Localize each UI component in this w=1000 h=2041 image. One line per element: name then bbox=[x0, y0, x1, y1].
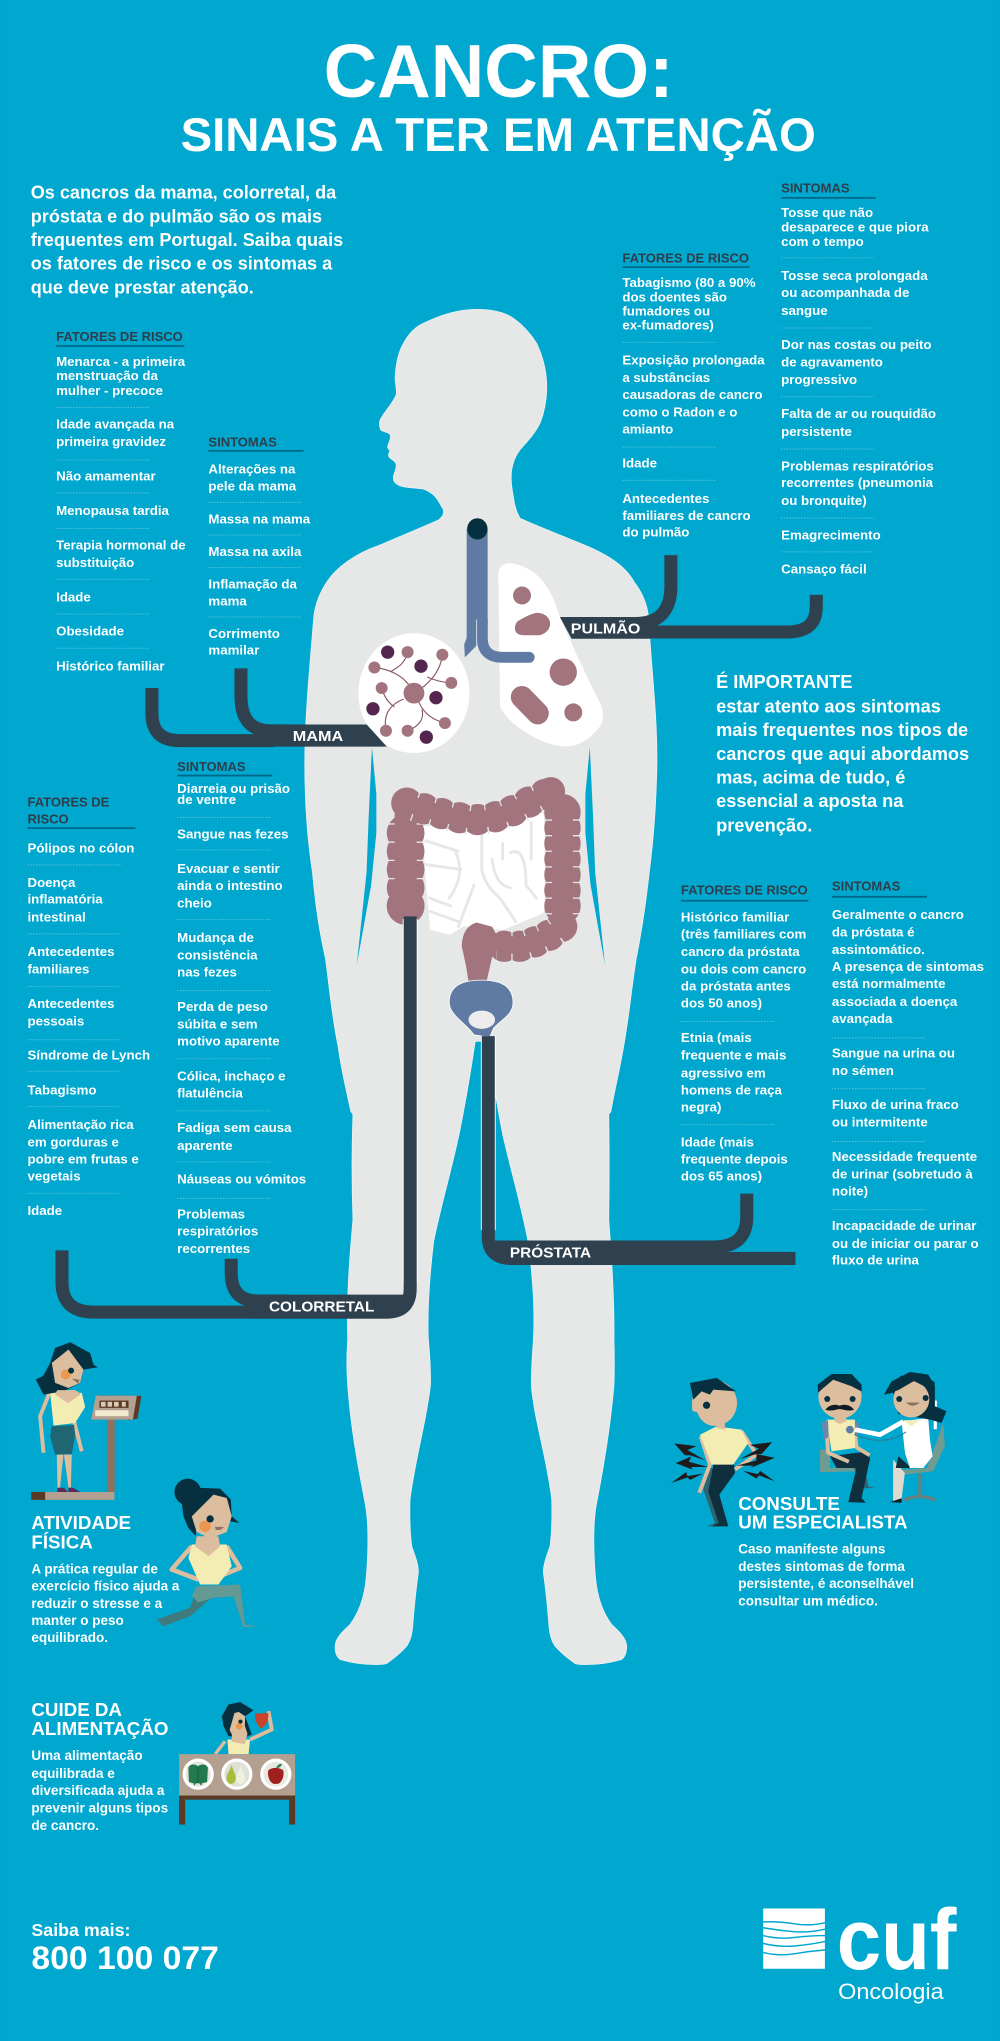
list: Sangue na urina ou bbox=[832, 1045, 955, 1060]
list: negra) bbox=[681, 1100, 721, 1115]
contact: phone number bbox=[31, 1920, 219, 1976]
callout: é importante: mas, acima de tudo, é bbox=[716, 767, 905, 787]
list: assintomático. bbox=[832, 942, 925, 957]
list: Exposição prolongada bbox=[622, 352, 765, 367]
text: consulte um especialista: consultar um médico. bbox=[738, 1593, 878, 1608]
heading: RISCO bbox=[27, 811, 69, 826]
heading: FATORES DE RISCO bbox=[56, 329, 183, 344]
list: mamilar bbox=[208, 642, 259, 657]
list: Sangue nas fezes bbox=[177, 827, 289, 842]
label: PULMÃO: PULMÃO bbox=[571, 620, 640, 638]
list: ou dois com cancro bbox=[681, 961, 806, 976]
text: atividade física: equilibrado. bbox=[31, 1630, 108, 1645]
callout: é importante: cancros que aqui abordamos bbox=[716, 744, 969, 764]
list: ou bronquite) bbox=[781, 493, 867, 508]
connector: pulmão bbox=[560, 555, 816, 639]
human body silhouette bbox=[305, 309, 657, 1665]
list: com o tempo bbox=[781, 234, 864, 249]
list: dos 50 anos) bbox=[681, 996, 762, 1011]
list: aparente bbox=[177, 1138, 233, 1153]
list: motivo aparente bbox=[177, 1034, 280, 1049]
list: A presença de sintomas bbox=[832, 959, 984, 974]
list: Evacuar e sentir bbox=[177, 861, 280, 876]
list: de ventre bbox=[177, 792, 236, 807]
list: progressivo bbox=[781, 372, 857, 387]
list: desaparece e que piora bbox=[781, 219, 929, 234]
list: súbita e sem bbox=[177, 1016, 258, 1031]
heading: FATORES DE RISCO bbox=[681, 883, 808, 898]
illustration: woman on a scale bbox=[31, 1342, 141, 1500]
list: respiratórios bbox=[177, 1224, 258, 1239]
list: agressivo em bbox=[681, 1065, 766, 1080]
list: Não amamentar bbox=[56, 468, 156, 483]
connector: próstata bbox=[488, 1036, 795, 1265]
list: Idade bbox=[56, 589, 91, 604]
list: dos 65 anos) bbox=[681, 1169, 762, 1184]
list: Tabagismo bbox=[27, 1082, 97, 1097]
list: Massa na axila bbox=[208, 544, 302, 559]
list: Mudança de bbox=[177, 930, 254, 945]
list: recorrentes bbox=[177, 1241, 250, 1256]
heading: consulte um especialista: UM ESPECIALISTA bbox=[738, 1512, 908, 1533]
list: Fluxo de urina fraco bbox=[832, 1097, 959, 1112]
text: atividade física: A prática regular de bbox=[31, 1561, 158, 1576]
list: mulher - precoce bbox=[56, 383, 163, 398]
list: sangue bbox=[781, 303, 828, 318]
panel: pulmão sintomas bbox=[781, 181, 940, 577]
label: PRÓSTATA: PRÓSTATA bbox=[510, 1244, 591, 1262]
list: pobre em frutas e bbox=[27, 1152, 139, 1167]
list: Histórico familiar bbox=[56, 659, 165, 674]
list: pessoais bbox=[27, 1013, 84, 1028]
list: frequente depois bbox=[681, 1152, 788, 1167]
illustration: patient and doctor bbox=[818, 1372, 946, 1503]
list: Falta de ar ou rouquidão bbox=[781, 406, 936, 421]
list: vegetais bbox=[27, 1169, 81, 1184]
list: Tabagismo (80 a 90% bbox=[622, 275, 756, 290]
intro text: frequentes em Portugal. Saiba quais bbox=[31, 230, 343, 250]
list: Antecedentes bbox=[27, 944, 114, 959]
list: frequente e mais bbox=[681, 1048, 786, 1063]
list: Menopausa tardia bbox=[56, 503, 170, 518]
panel: pulmão fatores de risco bbox=[622, 250, 768, 540]
callout: é importante: prevenção. bbox=[716, 816, 812, 836]
text: cuide da alimentação: de cancro. bbox=[31, 1818, 99, 1833]
list: noite) bbox=[832, 1184, 868, 1199]
list: (três familiares com bbox=[681, 927, 806, 942]
illustration: man in pain bbox=[671, 1378, 775, 1526]
list: Problemas respiratórios bbox=[781, 458, 934, 473]
panel: mama fatores de risco bbox=[56, 329, 189, 674]
list: Tosse seca prolongada bbox=[781, 268, 928, 283]
callout: é importante: essencial a aposta na bbox=[716, 791, 904, 811]
list: familiares bbox=[27, 961, 89, 976]
heading: SINTOMAS bbox=[177, 759, 246, 774]
lung bbox=[498, 563, 603, 747]
panel: mama sintomas bbox=[208, 434, 314, 657]
panel: colorretal sintomas bbox=[177, 759, 310, 1256]
list: homens de raça bbox=[681, 1082, 783, 1097]
list: do pulmão bbox=[622, 525, 689, 540]
text: consulte um especialista: persistente, é aconselhável bbox=[738, 1576, 914, 1591]
list: de agravamento bbox=[781, 355, 883, 370]
list: intestinal bbox=[27, 909, 86, 924]
list: Cólica, inchaço e bbox=[177, 1068, 286, 1083]
list: como o Radon e o bbox=[622, 405, 737, 420]
list: consistência bbox=[177, 948, 258, 963]
intro text: próstata e do pulmão são os mais bbox=[31, 206, 322, 226]
list: Alimentação rica bbox=[27, 1117, 134, 1132]
list: da próstata antes bbox=[681, 979, 791, 994]
connector: colorretal bbox=[62, 916, 410, 1319]
text: consulte um especialista: Caso manifeste alguns bbox=[738, 1541, 885, 1556]
intro text: os fatores de risco e os sintomas a bbox=[31, 254, 333, 274]
list: a substâncias bbox=[622, 370, 710, 385]
list: Cansaço fácil bbox=[781, 562, 867, 577]
logo: cuf oncologia bbox=[763, 1892, 957, 2004]
list: persistente bbox=[781, 424, 852, 439]
heading: cuide da alimentação: ALIMENTAÇÃO bbox=[31, 1718, 168, 1739]
panel: próstata sintomas bbox=[832, 879, 988, 1268]
list: mama bbox=[208, 593, 247, 608]
list: Obesidade bbox=[56, 624, 124, 639]
heading: SINTOMAS bbox=[832, 879, 901, 894]
text: atividade física: exercício físico ajuda a bbox=[31, 1578, 180, 1593]
list: nas fezes bbox=[177, 965, 237, 980]
list: Inflamação da bbox=[208, 577, 298, 592]
text: cuide da alimentação: diversificada ajuda a bbox=[31, 1783, 165, 1798]
list: ou intermitente bbox=[832, 1114, 928, 1129]
list: ou acompanhada de bbox=[781, 285, 909, 300]
list: Incapacidade de urinar bbox=[832, 1218, 976, 1233]
list: cheio bbox=[177, 896, 212, 911]
list: Histórico familiar bbox=[681, 909, 789, 924]
list: de urinar (sobretudo à bbox=[832, 1166, 973, 1181]
list: flatulência bbox=[177, 1085, 243, 1100]
text: cuide da alimentação: prevenir alguns tipos bbox=[31, 1800, 168, 1815]
list: associada a doença bbox=[832, 994, 958, 1009]
list: amianto bbox=[622, 422, 673, 437]
list: primeira gravidez bbox=[56, 434, 166, 449]
list: recorrentes (pneumonia bbox=[781, 475, 934, 490]
text: cuide da alimentação: Uma alimentação bbox=[31, 1748, 143, 1763]
text: atividade física: manter o peso bbox=[31, 1613, 124, 1628]
list: em gorduras e bbox=[27, 1134, 119, 1149]
list: Fadiga sem causa bbox=[177, 1120, 292, 1135]
list: Antecedentes bbox=[622, 491, 709, 506]
colon bbox=[387, 777, 565, 981]
callout: é importante bbox=[716, 671, 974, 836]
list: da próstata é bbox=[832, 924, 915, 939]
heading: SINTOMAS bbox=[208, 434, 277, 449]
list: dos doentes são bbox=[622, 289, 727, 304]
list: Idade bbox=[27, 1203, 62, 1218]
contact: phone number: Saiba mais: bbox=[31, 1920, 130, 1940]
callout: é importante: É IMPORTANTE bbox=[716, 671, 852, 692]
list: Menarca - a primeira bbox=[56, 354, 186, 369]
heading: SINTOMAS bbox=[781, 181, 850, 196]
list: está normalmente bbox=[832, 976, 945, 991]
list: no sémen bbox=[832, 1063, 894, 1078]
contact: phone number: 800 100 077 bbox=[31, 1940, 219, 1976]
bladder / prostate bbox=[449, 980, 513, 1037]
panel: próstata fatores de risco bbox=[681, 883, 810, 1184]
list: Diarreia ou prisão bbox=[177, 781, 290, 796]
panel: colorretal fatores de risco bbox=[27, 795, 154, 1218]
list: pele da mama bbox=[208, 479, 297, 494]
list: Pólipos no cólon bbox=[27, 840, 134, 855]
callout: é importante: estar atento aos sintomas bbox=[716, 697, 941, 717]
intro text: que deve prestar atenção. bbox=[31, 278, 254, 298]
list: avançada bbox=[832, 1011, 893, 1026]
intro text: Os cancros da mama, colorretal, da bbox=[31, 183, 337, 203]
small intestine bbox=[422, 813, 550, 935]
list: Problemas bbox=[177, 1206, 245, 1221]
trachea bbox=[464, 518, 529, 657]
connector: mama bbox=[152, 668, 387, 747]
list: cancro da próstata bbox=[681, 944, 800, 959]
illustration: woman with healthy food at a table bbox=[179, 1702, 295, 1825]
list: Necessidade frequente bbox=[832, 1149, 977, 1164]
heading: cuide da alimentação: CUIDE DA bbox=[31, 1699, 122, 1720]
list: Emagrecimento bbox=[781, 527, 881, 542]
list: Idade avançada na bbox=[56, 417, 175, 432]
list: ainda o intestino bbox=[177, 878, 283, 893]
callout: é importante: mais frequentes nos tipos de bbox=[716, 720, 968, 740]
logo: cuf oncologia: Oncologia bbox=[838, 1979, 945, 2004]
list: causadoras de cancro bbox=[622, 387, 762, 402]
heading: atividade física: ATIVIDADE bbox=[31, 1512, 131, 1533]
heading: consulte um especialista: CONSULTE bbox=[738, 1493, 840, 1514]
list: Antecedentes bbox=[27, 996, 114, 1011]
list: ex-fumadores) bbox=[622, 318, 714, 333]
list: Corrimento bbox=[208, 626, 280, 641]
illustration: woman exercising bbox=[157, 1479, 258, 1627]
list: Geralmente o cancro bbox=[832, 907, 964, 922]
title: SINAIS A TER EM ATENÇÃO bbox=[181, 108, 816, 162]
title bbox=[181, 29, 816, 162]
heading: FATORES DE RISCO bbox=[622, 250, 749, 265]
label: COLORRETAL: COLORRETAL bbox=[269, 1298, 374, 1315]
list: fluxo de urina bbox=[832, 1253, 920, 1268]
list: Massa na mama bbox=[208, 511, 311, 526]
list: menstruação da bbox=[56, 368, 158, 383]
list: familiares de cancro bbox=[622, 508, 751, 523]
list: substituição bbox=[56, 555, 134, 570]
breast tissue circle bbox=[358, 633, 470, 753]
list: Etnia (mais bbox=[681, 1030, 752, 1045]
list: Idade (mais bbox=[681, 1134, 754, 1149]
text: atividade física: reduzir o stresse e a bbox=[31, 1596, 163, 1611]
list: Síndrome de Lynch bbox=[27, 1048, 150, 1063]
list: Perda de peso bbox=[177, 999, 268, 1014]
gaps between arms and torso bbox=[357, 747, 605, 965]
text: consulte um especialista: destes sintomas de forma bbox=[738, 1559, 905, 1574]
list: Náuseas ou vómitos bbox=[177, 1172, 306, 1187]
list: Terapia hormonal de bbox=[56, 538, 186, 553]
list: inflamatória bbox=[27, 892, 103, 907]
list: ou de iniciar ou parar o bbox=[832, 1236, 979, 1251]
list: Tosse que não bbox=[781, 205, 873, 220]
list: fumadores ou bbox=[622, 303, 710, 318]
list: Alterações na bbox=[208, 462, 296, 477]
label: MAMA: MAMA bbox=[293, 728, 343, 745]
heading: FATORES DE bbox=[27, 795, 110, 810]
title: CANCRO: bbox=[324, 29, 674, 113]
list: Dor nas costas ou peito bbox=[781, 337, 932, 352]
list: Doença bbox=[27, 875, 76, 890]
logo: cuf oncologia: cuf bbox=[837, 1892, 957, 1988]
list: Idade bbox=[622, 456, 657, 471]
text: cuide da alimentação: equilibrada e bbox=[31, 1766, 115, 1781]
heading: atividade física: FÍSICA bbox=[31, 1531, 93, 1552]
